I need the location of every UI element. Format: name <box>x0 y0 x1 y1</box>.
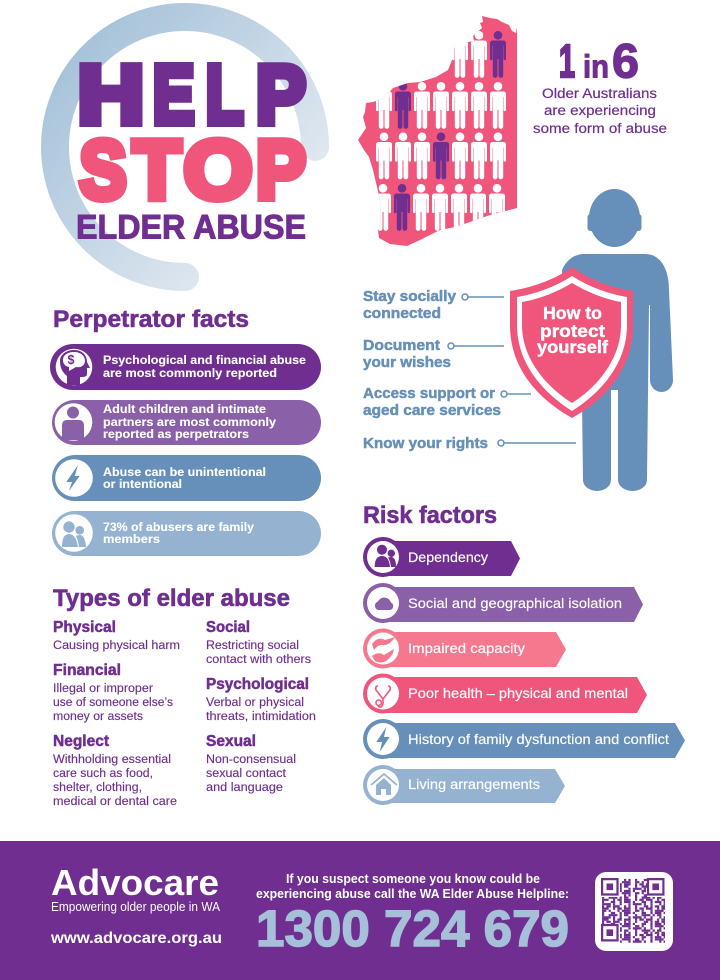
icon: cloud <box>375 598 393 610</box>
risk: dependency <box>363 537 520 577</box>
protection tips: Access support or <box>363 385 495 402</box>
protection tips: Know your rights <box>363 435 488 452</box>
protection tips: Stay socially <box>363 288 457 305</box>
icon: stethoscope <box>376 686 390 707</box>
risk: social and geographical isolation <box>363 583 643 623</box>
heading: Risk factors: Risk factors <box>363 502 497 529</box>
fact: psychological and financial abuse: are most commonly reported <box>103 366 277 380</box>
statistic caption: are experiencing <box>544 103 656 118</box>
shield text <box>537 303 608 357</box>
protection tips: connected <box>363 305 441 322</box>
icon: head with brain <box>60 350 90 385</box>
protection tips: Document <box>363 337 440 354</box>
type: neglect <box>53 733 177 808</box>
fact: psychological and financial abuse: Psychological and financial abuse <box>103 353 306 367</box>
tagline: Empowering older people in WA <box>51 900 221 914</box>
fact: 73% of abusers are family members: members <box>103 532 160 546</box>
helpline text <box>256 871 569 901</box>
statistic caption: Older Australians <box>542 86 657 101</box>
heading: Perpetrator facts: Perpetrator facts <box>53 306 249 333</box>
icon: lightning bolt <box>66 465 80 491</box>
type: neglect: medical or dental care <box>53 794 177 808</box>
logo: Advocare: Advocare <box>51 862 219 903</box>
heading: Types of elder abuse: Types of elder abuse <box>53 585 290 612</box>
type: social: contact with others <box>206 652 311 666</box>
panel: perpetrator facts <box>50 344 321 556</box>
fact: adult children and intimate partners: Adult children and intimate <box>103 402 266 416</box>
type: psychological: Verbal or physical <box>206 695 304 709</box>
risk: poor health: Poor health – physical and mental <box>408 685 628 701</box>
shield text: protect <box>540 321 605 341</box>
protection tips: your wishes <box>363 354 451 371</box>
type: neglect: care such as food, <box>53 766 153 780</box>
helpline number: 1300 724 679 <box>256 900 569 957</box>
fact: unintentional or intentional: Abuse can be unintentional <box>103 465 266 479</box>
fact: adult children and intimate partners: reported as perpetrators <box>103 427 249 441</box>
title: Help Stop Elder Abuse <box>76 48 306 246</box>
title line: ELDER ABUSE: ELDER ABUSE <box>76 208 306 246</box>
fact: psychological and financial abuse <box>50 344 321 390</box>
title line: STOP: O <box>184 123 252 216</box>
icon: head with brain: $ <box>68 353 74 367</box>
type: social: Social <box>206 619 250 636</box>
fact: 73% of abusers are family members <box>52 511 321 556</box>
helpline text: experiencing abuse call the WA Elder Abuse Helpline: <box>256 886 569 901</box>
title line: HELP: E <box>153 48 194 141</box>
fact: unintentional or intentional <box>52 455 321 501</box>
type: sexual: Non-consensual <box>206 752 296 766</box>
type: psychological: Psychological <box>206 676 309 693</box>
shield text: How to <box>543 303 602 323</box>
type: social: Restricting social <box>206 638 299 652</box>
risk: social and geographical isolation: Social and geographical isolation <box>408 595 622 611</box>
statistic: 1 in 6 <box>559 35 639 88</box>
how to protect yourself connectors <box>448 294 576 446</box>
type: sexual <box>206 733 296 794</box>
type: neglect: Withholding essential <box>53 752 171 766</box>
fact: adult children and intimate partners: partners are most commonly <box>103 415 276 429</box>
decorative arc behind title <box>55 17 315 277</box>
risk: dependency: Dependency <box>408 549 488 565</box>
type: psychological <box>206 676 316 723</box>
title line: HELP: H <box>78 48 144 141</box>
risk: living arrangements: Living arrangements <box>408 776 540 792</box>
website: www.advocare.org.au <box>50 930 222 947</box>
type: financial: Financial <box>53 662 121 679</box>
risk: history of family dysfunction and conflict: History of family dysfunction and conflict <box>408 731 669 747</box>
risk: impaired capacity: Impaired capacity <box>408 640 525 656</box>
type: neglect: Neglect <box>53 733 109 750</box>
risk: history of family dysfunction and conflict <box>363 719 685 759</box>
word in: in <box>583 48 609 84</box>
map of Western Australia with people <box>358 16 517 246</box>
protection tips <box>363 288 501 452</box>
icon: house <box>371 774 397 795</box>
QR code <box>595 872 673 951</box>
shield text: yourself <box>537 337 608 357</box>
statistic caption <box>533 86 667 136</box>
title line: HELP: L <box>206 48 243 141</box>
figure: standing person <box>562 189 673 491</box>
risk: impaired capacity <box>363 628 566 668</box>
numeral 1: 1 <box>559 35 575 87</box>
panel: types of elder abuse <box>53 619 316 808</box>
fact: 73% of abusers are family members: 73% of abusers are family <box>103 520 254 534</box>
type: sexual: and language <box>206 780 283 794</box>
fact: unintentional or intentional: or intentional <box>103 477 182 491</box>
type: sexual: sexual contact <box>206 766 287 780</box>
panel: risk factors <box>363 537 685 805</box>
title line: STOP: S <box>80 123 126 216</box>
risk: poor health <box>363 674 647 714</box>
type: financial: Illegal or improper <box>53 681 153 695</box>
title line: HELP: P <box>256 48 306 141</box>
type: social <box>206 619 311 666</box>
icon: caring hands <box>372 637 395 662</box>
type: physical <box>53 619 180 652</box>
type: financial: money or assets <box>53 709 143 723</box>
protection tips: aged care services <box>363 402 501 419</box>
icon: two people <box>375 545 396 567</box>
map shape <box>358 16 517 246</box>
icon: two people <box>62 521 86 547</box>
people grid <box>375 31 506 231</box>
icon: person <box>62 406 84 440</box>
type: financial: use of someone else’s <box>53 695 173 709</box>
shield: how to protect yourself <box>510 267 633 418</box>
type: sexual: Sexual <box>206 733 256 750</box>
type: physical: Physical <box>53 619 116 636</box>
type: psychological: threats, intimidation <box>206 709 316 723</box>
title line: STOP: P <box>256 123 306 216</box>
title line: STOP: T <box>133 123 181 216</box>
fact: adult children and intimate partners <box>52 400 321 445</box>
risk: living arrangements <box>363 765 565 805</box>
footer band <box>0 841 720 980</box>
numeral 6: 6 <box>612 36 639 88</box>
type: neglect: shelter, clothing, <box>53 780 142 794</box>
statistic caption: some form of abuse <box>533 121 667 136</box>
helpline text: If you suspect someone you know could be <box>286 871 540 886</box>
type: physical: Causing physical harm <box>53 638 180 652</box>
icon: lightning bolt <box>376 727 390 752</box>
type: financial <box>53 662 173 723</box>
